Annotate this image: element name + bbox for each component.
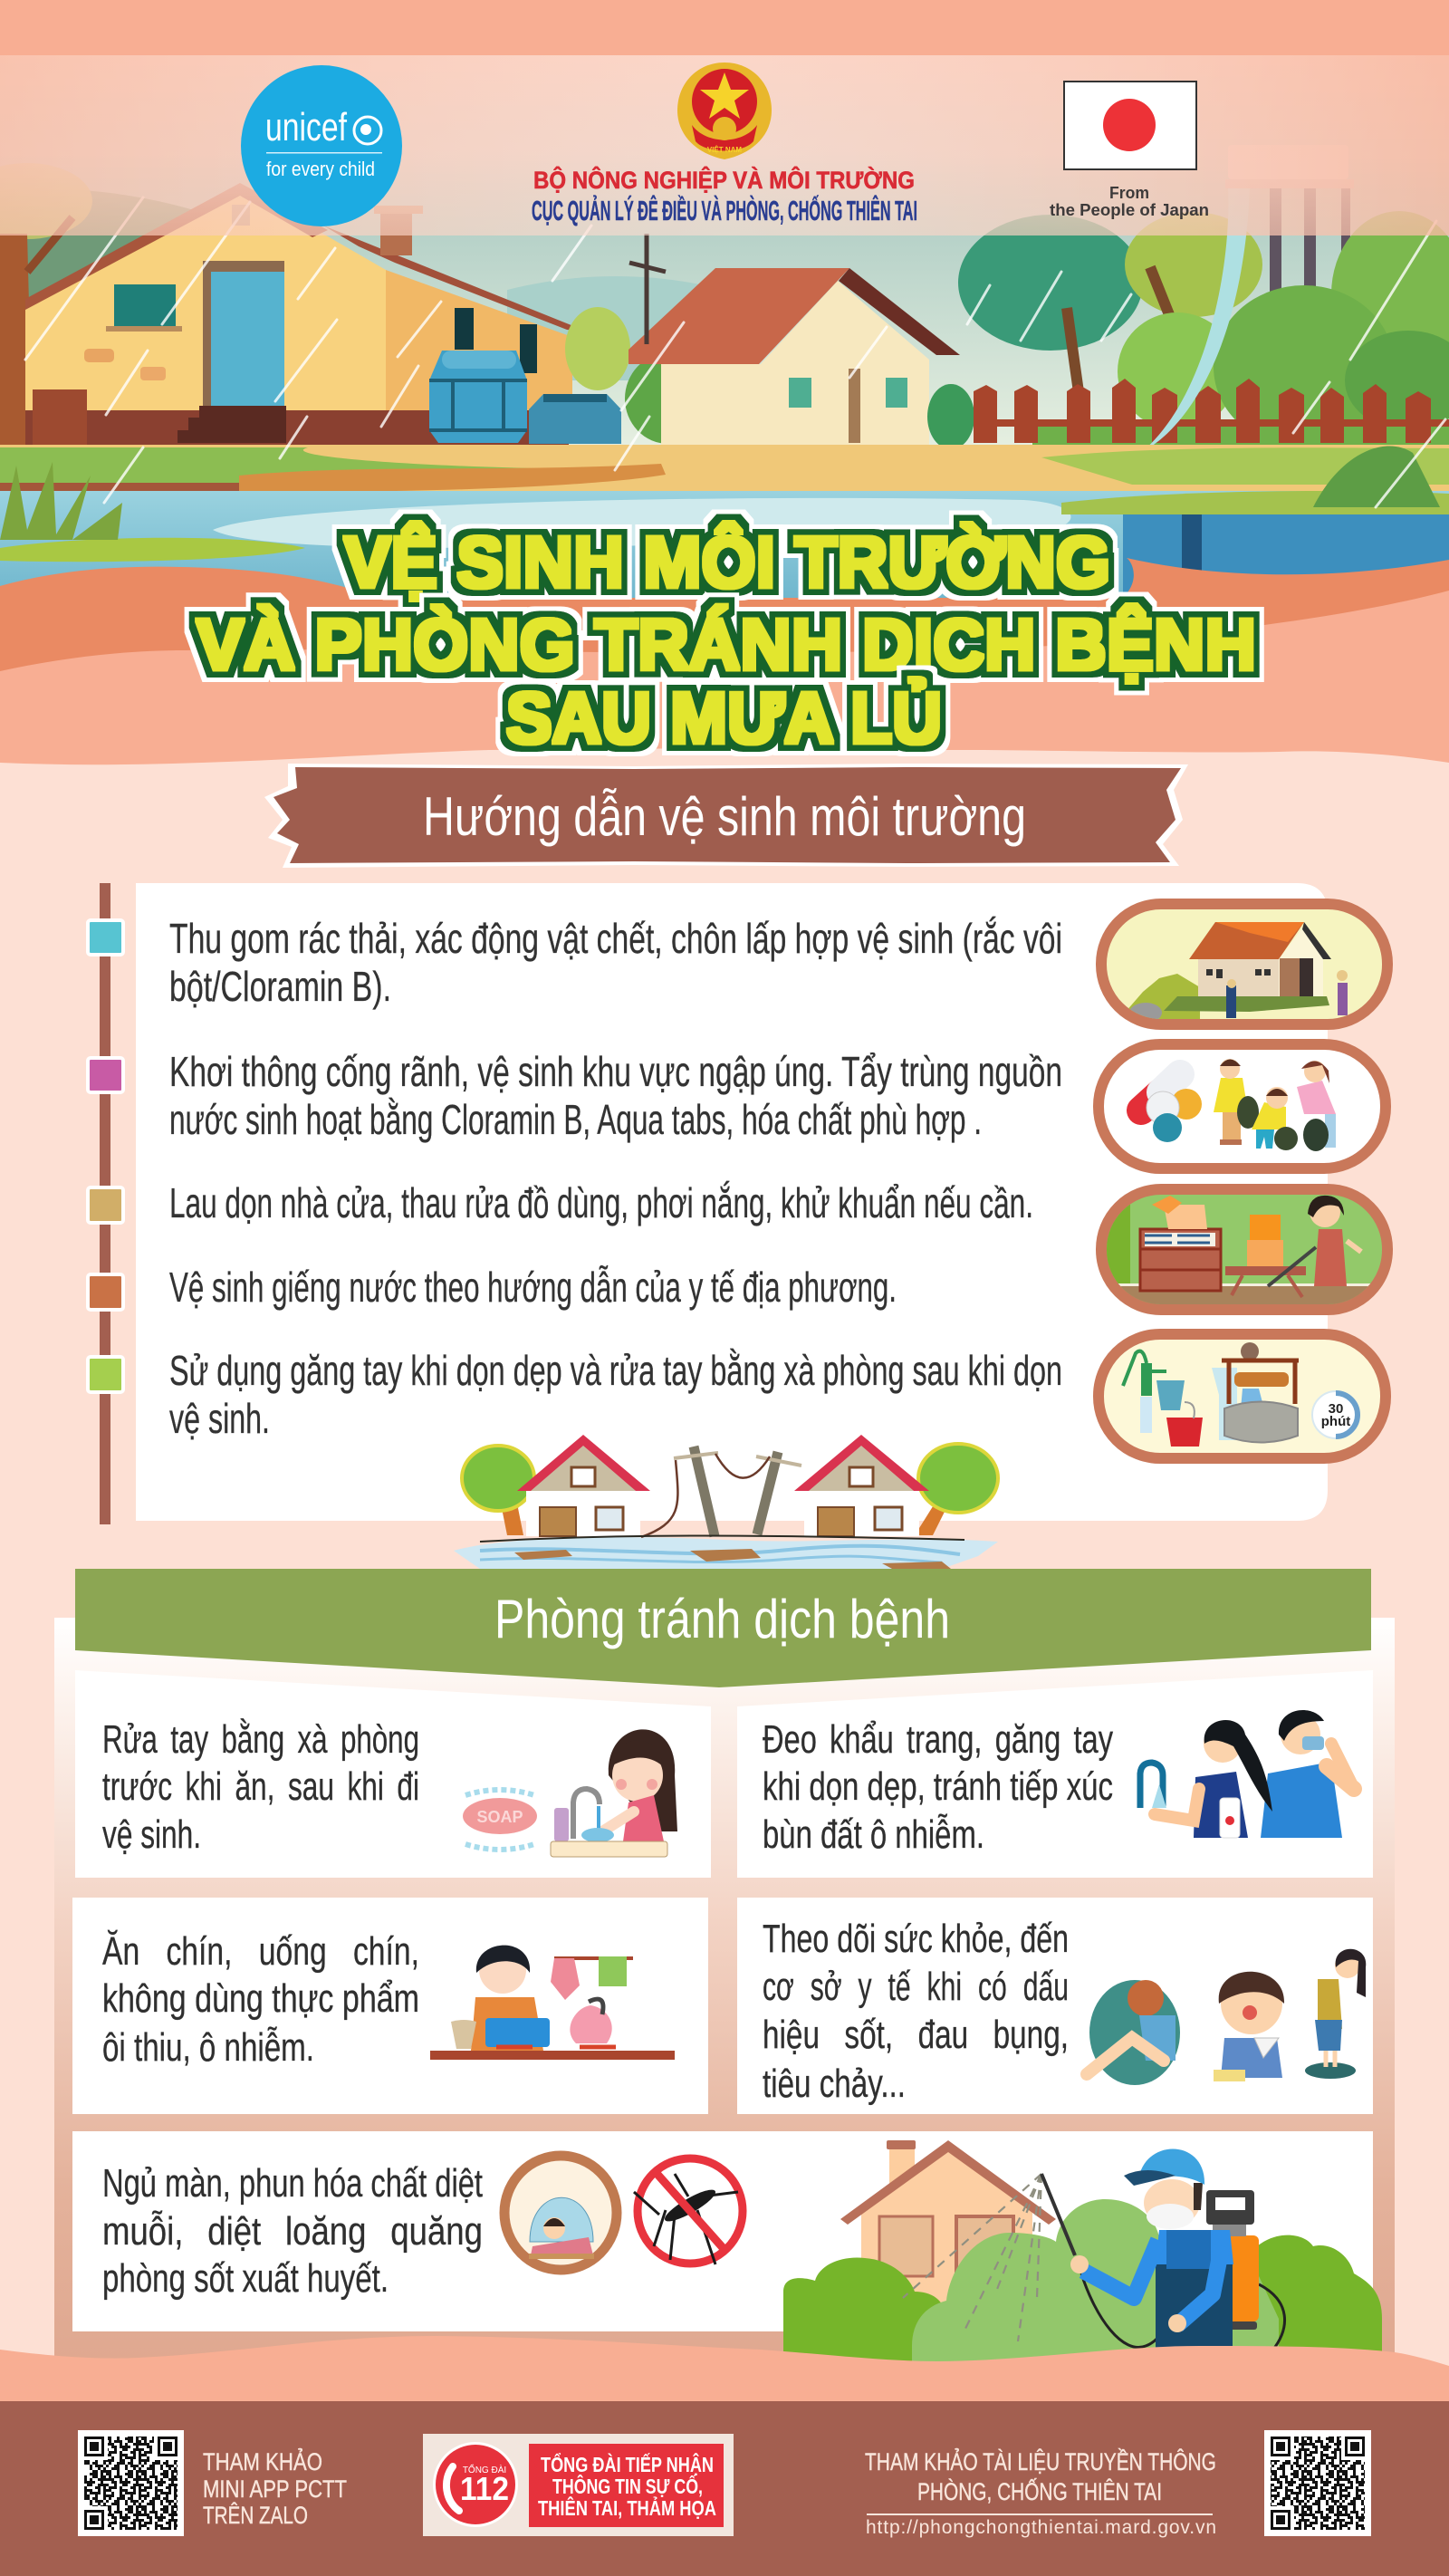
text: hiệu sốt, đau bụng, — [763, 2013, 1069, 2057]
step marker 5 — [88, 1357, 123, 1392]
icon: home cleaning pill — [1101, 1189, 1387, 1310]
title: VỆ SINH MÔI TRƯỜNG — [344, 522, 1110, 602]
icon: children with symptoms — [1087, 1949, 1366, 2085]
text: muỗi, diệt loăng quăng — [102, 2209, 483, 2254]
step 2 text: nước sinh hoạt bằng Cloramin B, Aqua tabs, hóa chất phù hợp . — [169, 1096, 982, 1143]
hotline 112 badge: 112 — [460, 2470, 509, 2507]
text: không dùng thực phẩm — [102, 1976, 419, 2021]
footer text: communication documents — [865, 2446, 1216, 2538]
hotline 112 badge: THÔNG TIN SỰ CỐ, — [552, 2474, 703, 2498]
icon: well disinfection pill: phút — [1321, 1414, 1350, 1429]
hotline 112 badge: TỔNG ĐÀI — [463, 2464, 506, 2475]
veil side tint — [0, 55, 1449, 235]
footer text: Zalo mini app: THAM KHẢO — [203, 2446, 322, 2475]
text: tiêu chảy... — [763, 2062, 906, 2106]
card: mask and gloves — [737, 1670, 1373, 1878]
text: vệ sinh. — [102, 1812, 201, 1857]
ministry name: BỘ NÔNG NGHIỆP VÀ MÔI TRƯỜNG — [533, 166, 915, 194]
text: phòng sốt xuất huyết. — [102, 2256, 389, 2301]
step 5 text: Sử dụng găng tay khi dọn dẹp và rửa tay bằng xà phòng sau khi dọn — [169, 1347, 1062, 1394]
icon: well disinfection pill — [1099, 1334, 1386, 1458]
title: VÀ PHÒNG TRÁNH DỊCH BỆNH — [197, 604, 1256, 685]
icon: cooking — [430, 1946, 675, 2060]
QR code: Zalo mini app — [78, 2430, 184, 2536]
step 1 text: bột/Cloramin B). — [169, 963, 391, 1010]
river — [0, 446, 1449, 609]
text: trước khi ăn, sau khi đi — [102, 1764, 419, 1809]
water tower — [1228, 177, 1350, 292]
panel: disease prevention background — [54, 1618, 1395, 2379]
ground — [0, 445, 1449, 492]
waterfall — [1150, 219, 1246, 445]
text — [763, 1917, 1069, 2106]
step 1 text — [169, 915, 1062, 1010]
pale sky veil — [0, 55, 1449, 235]
QR code: website — [1264, 2430, 1371, 2536]
card: hand washing — [75, 1670, 711, 1878]
dark bushes — [783, 2235, 1382, 2378]
text: ôi thiu, ô nhiễm. — [102, 2025, 314, 2070]
bottom wave — [0, 2336, 1449, 2402]
house right — [794, 1435, 929, 1536]
logo: UNICEF: unicef — [265, 105, 348, 149]
footer text: Zalo mini app: MINI APP PCTT — [203, 2475, 347, 2503]
icon: couple wearing masks — [1140, 1710, 1354, 1838]
text — [102, 1717, 419, 1857]
icon: medicine and cleaning team pill — [1099, 1044, 1386, 1168]
house left — [517, 1435, 650, 1536]
house — [840, 2140, 1056, 2319]
step 2 text: Khơi thông cống rãnh, vệ sinh khu vực ngập úng. Tẩy trùng nguồn — [169, 1048, 1062, 1095]
timeline bar — [100, 883, 110, 1524]
title — [197, 522, 1256, 758]
text — [102, 2161, 483, 2301]
text — [102, 1929, 419, 2070]
logo: UNICEF — [241, 65, 402, 226]
icon: sleeping under net — [504, 2156, 617, 2270]
title: SAU MƯA LỦ — [506, 678, 942, 758]
bushes — [565, 307, 661, 444]
heading banner: environmental hygiene guide — [264, 764, 1188, 868]
step 5 text — [169, 1347, 1062, 1442]
icon: soap: SOAP — [476, 1808, 523, 1826]
step 5 text: vệ sinh. — [169, 1395, 270, 1442]
step marker 1 — [88, 920, 123, 955]
leaning power poles — [641, 1447, 801, 1537]
text: cơ sở y tế khi có dấu — [763, 1965, 1069, 2009]
floating planks — [514, 1549, 951, 1569]
ministry name — [532, 166, 917, 226]
ministry name: CỤC QUẢN LÝ ĐÊ ĐIỀU VÀ PHÒNG, CHỐNG THIÊN TAI — [532, 194, 917, 226]
house two — [629, 268, 960, 445]
text: Theo dõi sức khỏe, đến — [763, 1917, 1069, 1961]
step 1 text: Thu gom rác thải, xác động vật chết, chôn lấp hợp vệ sinh (rắc vôi — [169, 915, 1062, 962]
footer text: communication documents: THAM KHẢO TÀI LIỆU TRUYỀN THÔNG — [865, 2446, 1216, 2475]
footer text: communication documents: http://phongchongthientai.mard.gov.vn — [866, 2517, 1216, 2538]
text: Đeo khẩu trang, găng tay — [763, 1717, 1113, 1762]
logo: Vietnam national emblem: VIỆT NAM — [707, 146, 742, 154]
illustration: rainy village scene — [0, 55, 1449, 609]
utility pole — [629, 234, 666, 344]
icon: soap — [463, 1790, 537, 1850]
icon: no mosquito sign — [634, 2158, 743, 2264]
tree left — [0, 163, 92, 445]
step marker 2 — [88, 1058, 123, 1092]
illustration: house and pesticide sprayer — [783, 2140, 1382, 2378]
footer band — [0, 2401, 1449, 2576]
heading banner: environmental hygiene guide: Hướng dẫn vệ sinh môi trường — [423, 786, 1026, 847]
icon: house clean-up pill — [1101, 904, 1387, 1024]
text: Ăn chín, uống chín, — [102, 1929, 419, 1974]
text: khi dọn dẹp, tránh tiếp xúc — [763, 1764, 1113, 1809]
hotline 112 badge: TỔNG ĐÀI TIẾP NHẬN — [541, 2452, 714, 2476]
step 3 text: Lau dọn nhà cửa, thau rửa đồ dùng, phơi nắng, khử khuẩn nếu cần. — [169, 1179, 1033, 1226]
tree left of houses — [462, 1446, 534, 1535]
heading ribbon: disease prevention: Phòng tránh dịch bệnh — [494, 1589, 950, 1649]
spray mist — [903, 2174, 1041, 2341]
water tanks — [429, 351, 621, 444]
house one — [25, 183, 587, 445]
card: mosquito prevention — [72, 2131, 1373, 2331]
top band — [0, 0, 1449, 55]
text — [763, 1717, 1113, 1857]
waves under the title — [0, 558, 1449, 764]
step marker 3 — [88, 1187, 123, 1223]
trees and bushes right — [927, 211, 1449, 449]
icon: girl washing hands — [551, 1729, 677, 1857]
icon: well disinfection pill: 30 — [1329, 1401, 1343, 1417]
rain — [25, 197, 1445, 507]
sprayer man — [1041, 2148, 1285, 2352]
light bushes — [912, 2199, 1279, 2378]
heading ribbon: disease prevention — [75, 1569, 1371, 1687]
hotline 112 badge — [423, 2434, 734, 2536]
text: Rửa tay bằng xà phòng — [102, 1717, 419, 1762]
text: Ngủ màn, phun hóa chất diệt — [102, 2161, 483, 2206]
hotline 112 badge: THIÊN TAI, THẢM HỌA — [538, 2494, 716, 2520]
footer text: communication documents: PHÒNG, CHỐNG THIÊN TAI — [917, 2476, 1162, 2505]
logo: Japan flag: the People of Japan — [1050, 201, 1209, 219]
step marker 4 — [88, 1274, 123, 1310]
step 2 text — [169, 1048, 1062, 1143]
step 4 text: Vệ sinh giếng nước theo hướng dẫn của y tế địa phương. — [169, 1264, 897, 1311]
card: health monitoring — [737, 1898, 1373, 2114]
logo: Vietnam national emblem — [677, 62, 772, 159]
logo: UNICEF: for every child — [266, 158, 375, 180]
panel: hygiene steps — [88, 883, 1328, 1524]
logo: Japan flag — [1050, 82, 1209, 219]
logo: Japan flag: From — [1109, 184, 1149, 202]
footer text: Zalo mini app — [203, 2446, 347, 2529]
illustration: flooded houses — [454, 1435, 998, 1569]
tree right of houses — [915, 1444, 998, 1535]
text: bùn đất ô nhiễm. — [763, 1812, 984, 1857]
wooden fence — [974, 379, 1449, 443]
card: safe food — [72, 1898, 708, 2114]
footer text: Zalo mini app: TRÊN ZALO — [203, 2501, 308, 2529]
